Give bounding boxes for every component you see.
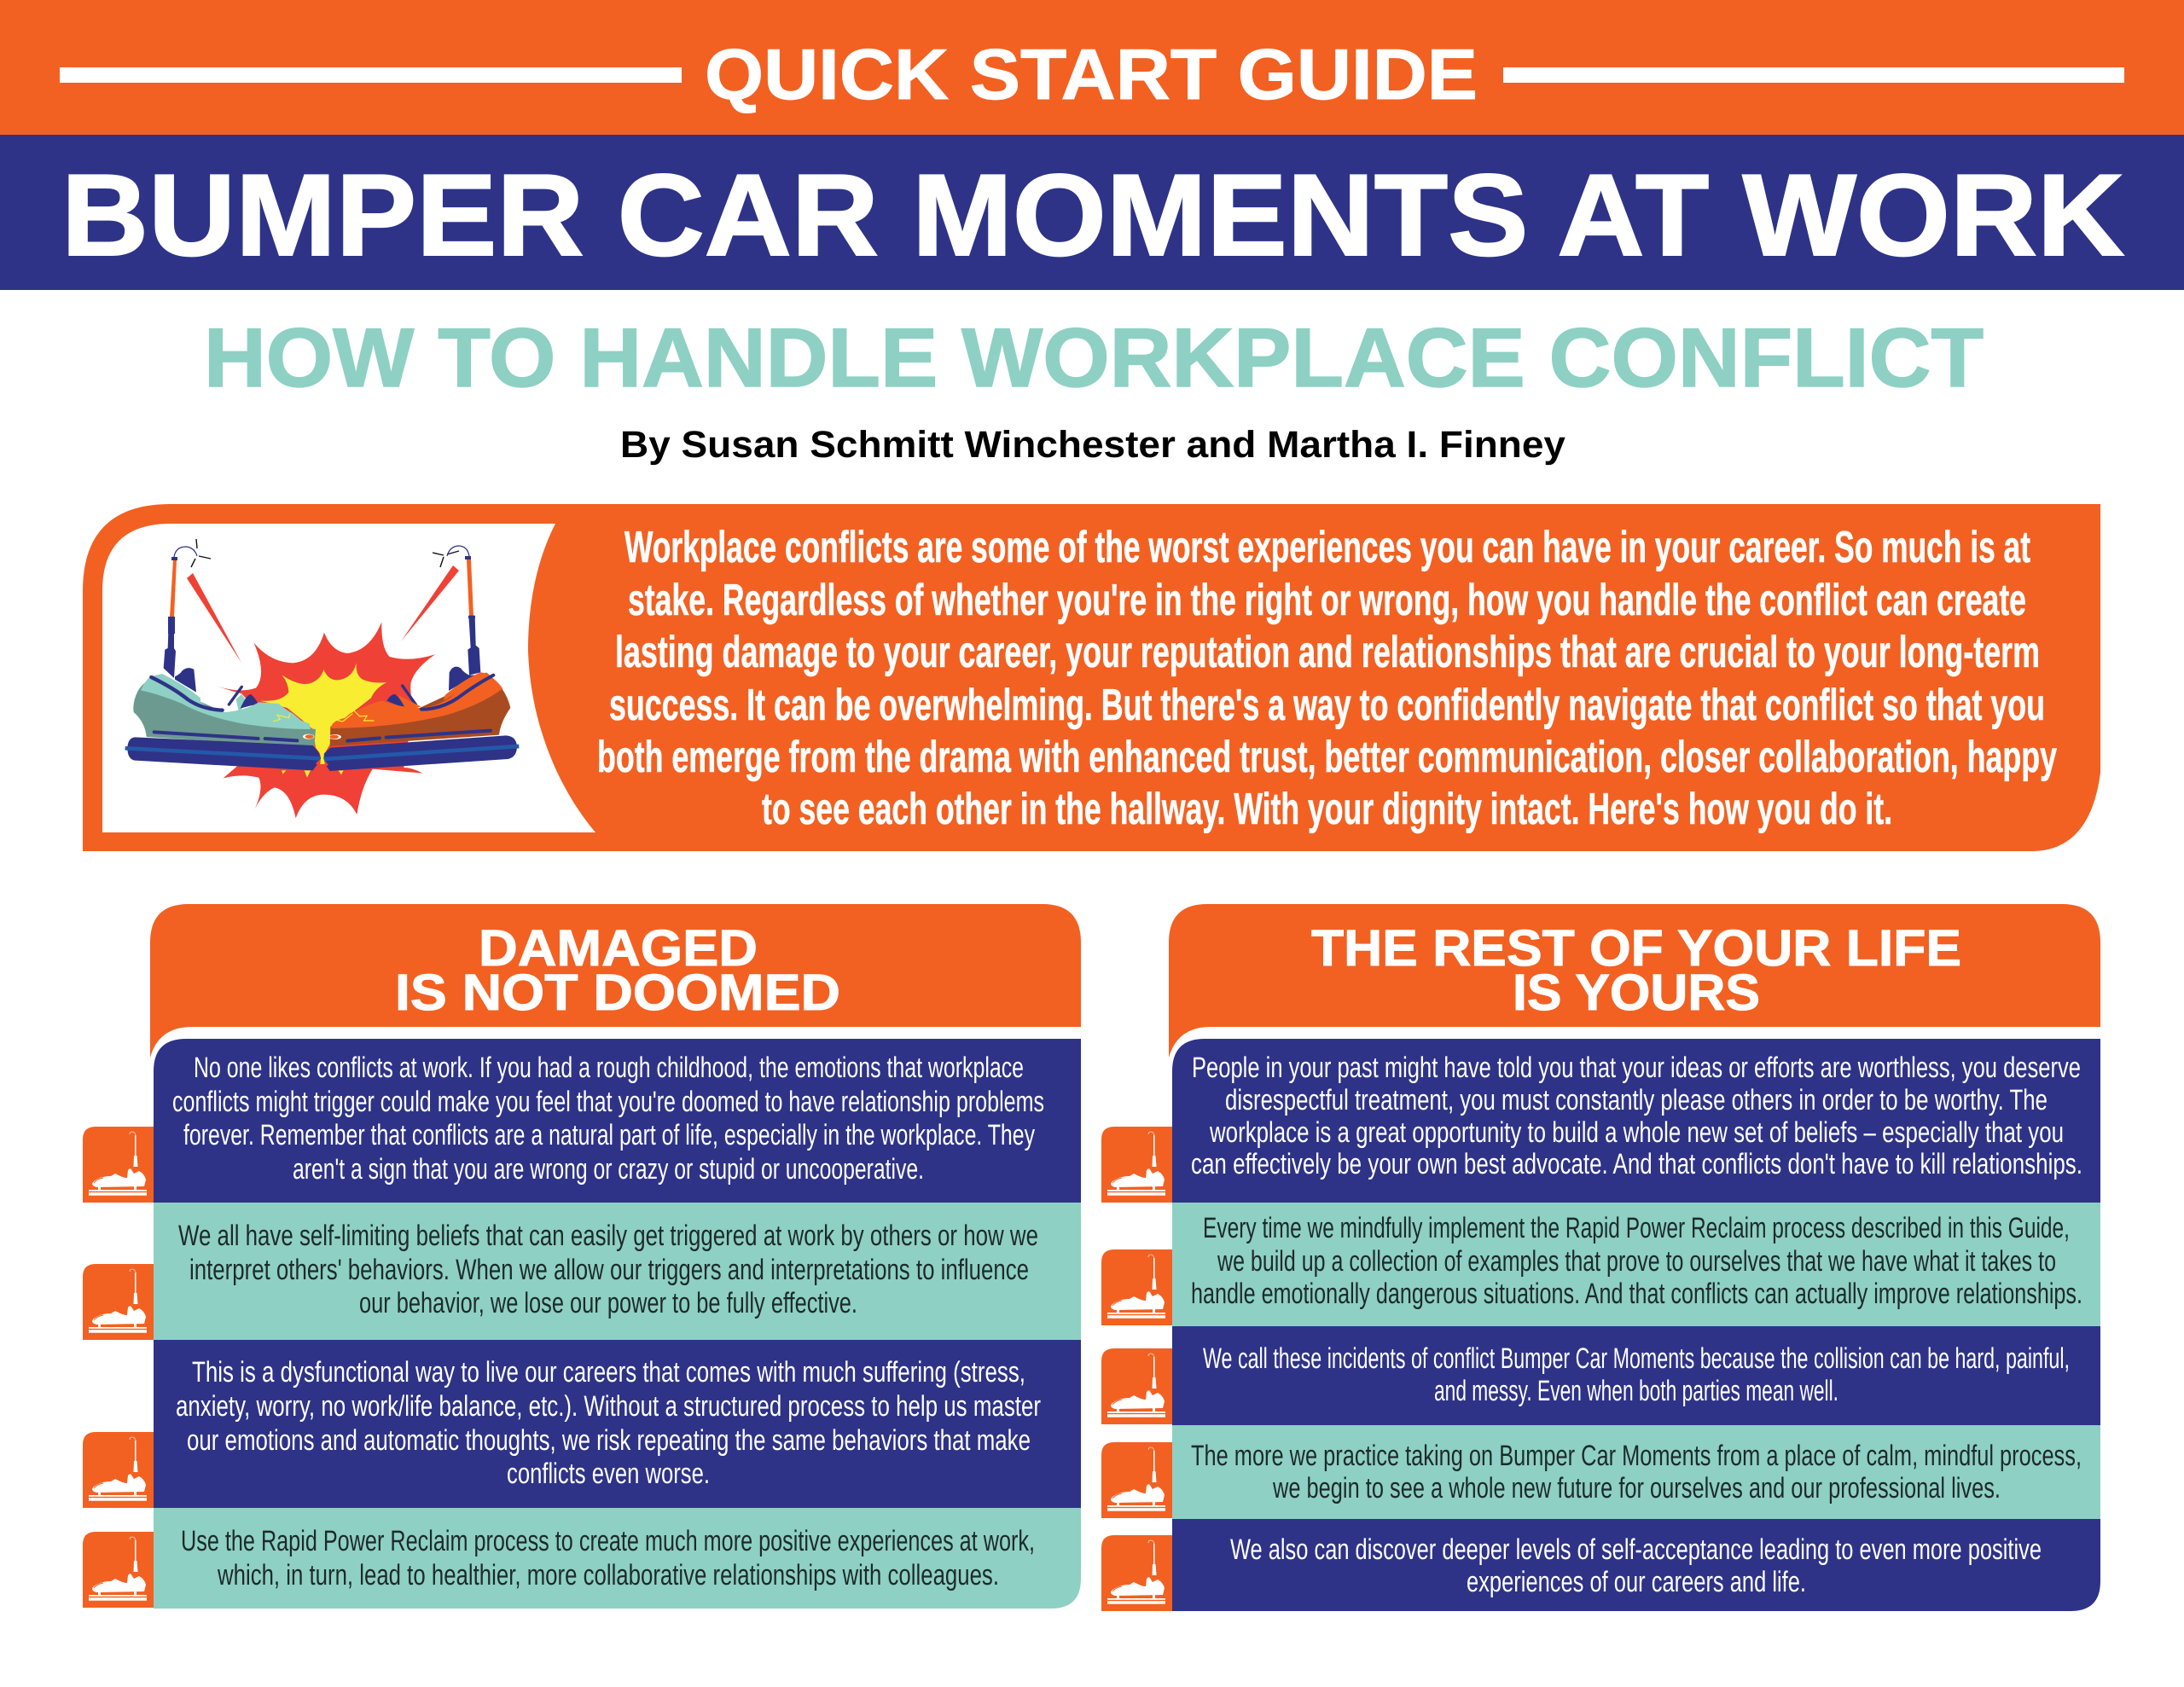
row 3 text (176, 1356, 1041, 1490)
header block: DAMAGED (479, 919, 758, 977)
row 1 text (1191, 1052, 2082, 1180)
row 1 text: forever. Remember that conflicts are a natural part of life, especially in the workplace. They (183, 1119, 1035, 1151)
row 1 text: No one likes conflicts at work. If you had a rough childhood, the emotions that workplace (194, 1052, 1024, 1084)
icon: bumper car (1101, 1249, 1172, 1325)
row 1 text (172, 1052, 1044, 1186)
icon: bumper car (1101, 1535, 1172, 1611)
row 5 text: experiences of our careers and life. (1467, 1566, 1806, 1598)
icon: bumper car (83, 1264, 154, 1340)
header block: IS NOT DOOMED (395, 964, 840, 1021)
header block (1169, 904, 2100, 1058)
icon: bumper car (83, 1532, 154, 1608)
icon: bumper car (83, 1432, 154, 1508)
row 3 text: our emotions and automatic thoughts, we risk repeating the same behaviors that make (187, 1424, 1031, 1457)
row 1 (83, 1039, 1081, 1203)
row 1 text: aren't a sign that you are wrong or crazy or stupid or uncooperative. (293, 1153, 924, 1186)
header block: THE REST OF YOUR LIFE (1311, 919, 1961, 977)
panel: damaged is not doomed (83, 904, 1081, 1609)
row 4 text: Use the Rapid Power Reclaim process to create much more positive experiences at work, (181, 1525, 1035, 1557)
row 3 text: anxiety, worry, no work/life balance, etc.). Without a structured process to help us master (176, 1390, 1041, 1423)
row 3 (1101, 1326, 2100, 1425)
row 3 text: conflicts even worse. (507, 1458, 710, 1490)
header block (150, 904, 1081, 1058)
row 3 (83, 1340, 1081, 1508)
subtitle: HOW TO HANDLE WORKPLACE CONFLICT (204, 310, 1984, 404)
row 2 (1101, 1203, 2100, 1326)
title: BUMPER CAR MOMENTS AT WORK (61, 150, 2124, 280)
row 4 (83, 1508, 1081, 1609)
icon: bumper car (83, 1127, 154, 1203)
sparks and poles (168, 539, 475, 663)
row 4 (1101, 1425, 2100, 1519)
row 1 (1101, 1039, 2100, 1203)
row 2 text (1191, 1212, 2082, 1310)
row 2 text: interpret others' behaviors. When we allow our triggers and interpretations to influence (189, 1254, 1029, 1286)
icon: bumper car (1101, 1348, 1172, 1424)
explosion (216, 622, 435, 818)
panel: the rest of your life is yours (1101, 904, 2100, 1611)
row 2 text (178, 1220, 1038, 1319)
row 3 text: This is a dysfunctional way to live our careers that comes with much suffering (stress, (192, 1356, 1025, 1388)
row 5 text (1230, 1533, 2042, 1598)
row 2 (83, 1203, 1081, 1340)
right car (323, 616, 519, 771)
row 2 text: our behavior, we lose our power to be fully effective. (359, 1287, 857, 1319)
row 3 text: and messy. Even when both parties mean well. (1434, 1375, 1838, 1407)
illustration: colliding bumper cars (125, 539, 519, 818)
banner: quick start guide (0, 0, 2184, 135)
title band (0, 135, 2184, 290)
row 4 text (1191, 1440, 2082, 1504)
icon: bumper car (1101, 1442, 1172, 1518)
icon: bumper car (1101, 1127, 1172, 1203)
intro text (597, 523, 2057, 834)
row 5 (1101, 1519, 2100, 1611)
row 3 text (1203, 1342, 2070, 1407)
header block: IS YOURS (1513, 964, 1760, 1021)
authors byline: By Susan Schmitt Winchester and Martha I. Finney (620, 424, 1566, 466)
row 2 text: We all have self-limiting beliefs that can easily get triggered at work by others or how we (178, 1220, 1038, 1252)
left car (125, 631, 321, 770)
row 1 text: conflicts might trigger could make you feel that you're doomed to have relationship problems (172, 1086, 1044, 1118)
panel: intro (83, 504, 2100, 851)
banner text: QUICK START GUIDE (705, 34, 1478, 114)
row 4 text (181, 1525, 1035, 1591)
row 4 text: which, in turn, lead to healthier, more collaborative relationships with colleagues. (217, 1559, 999, 1591)
